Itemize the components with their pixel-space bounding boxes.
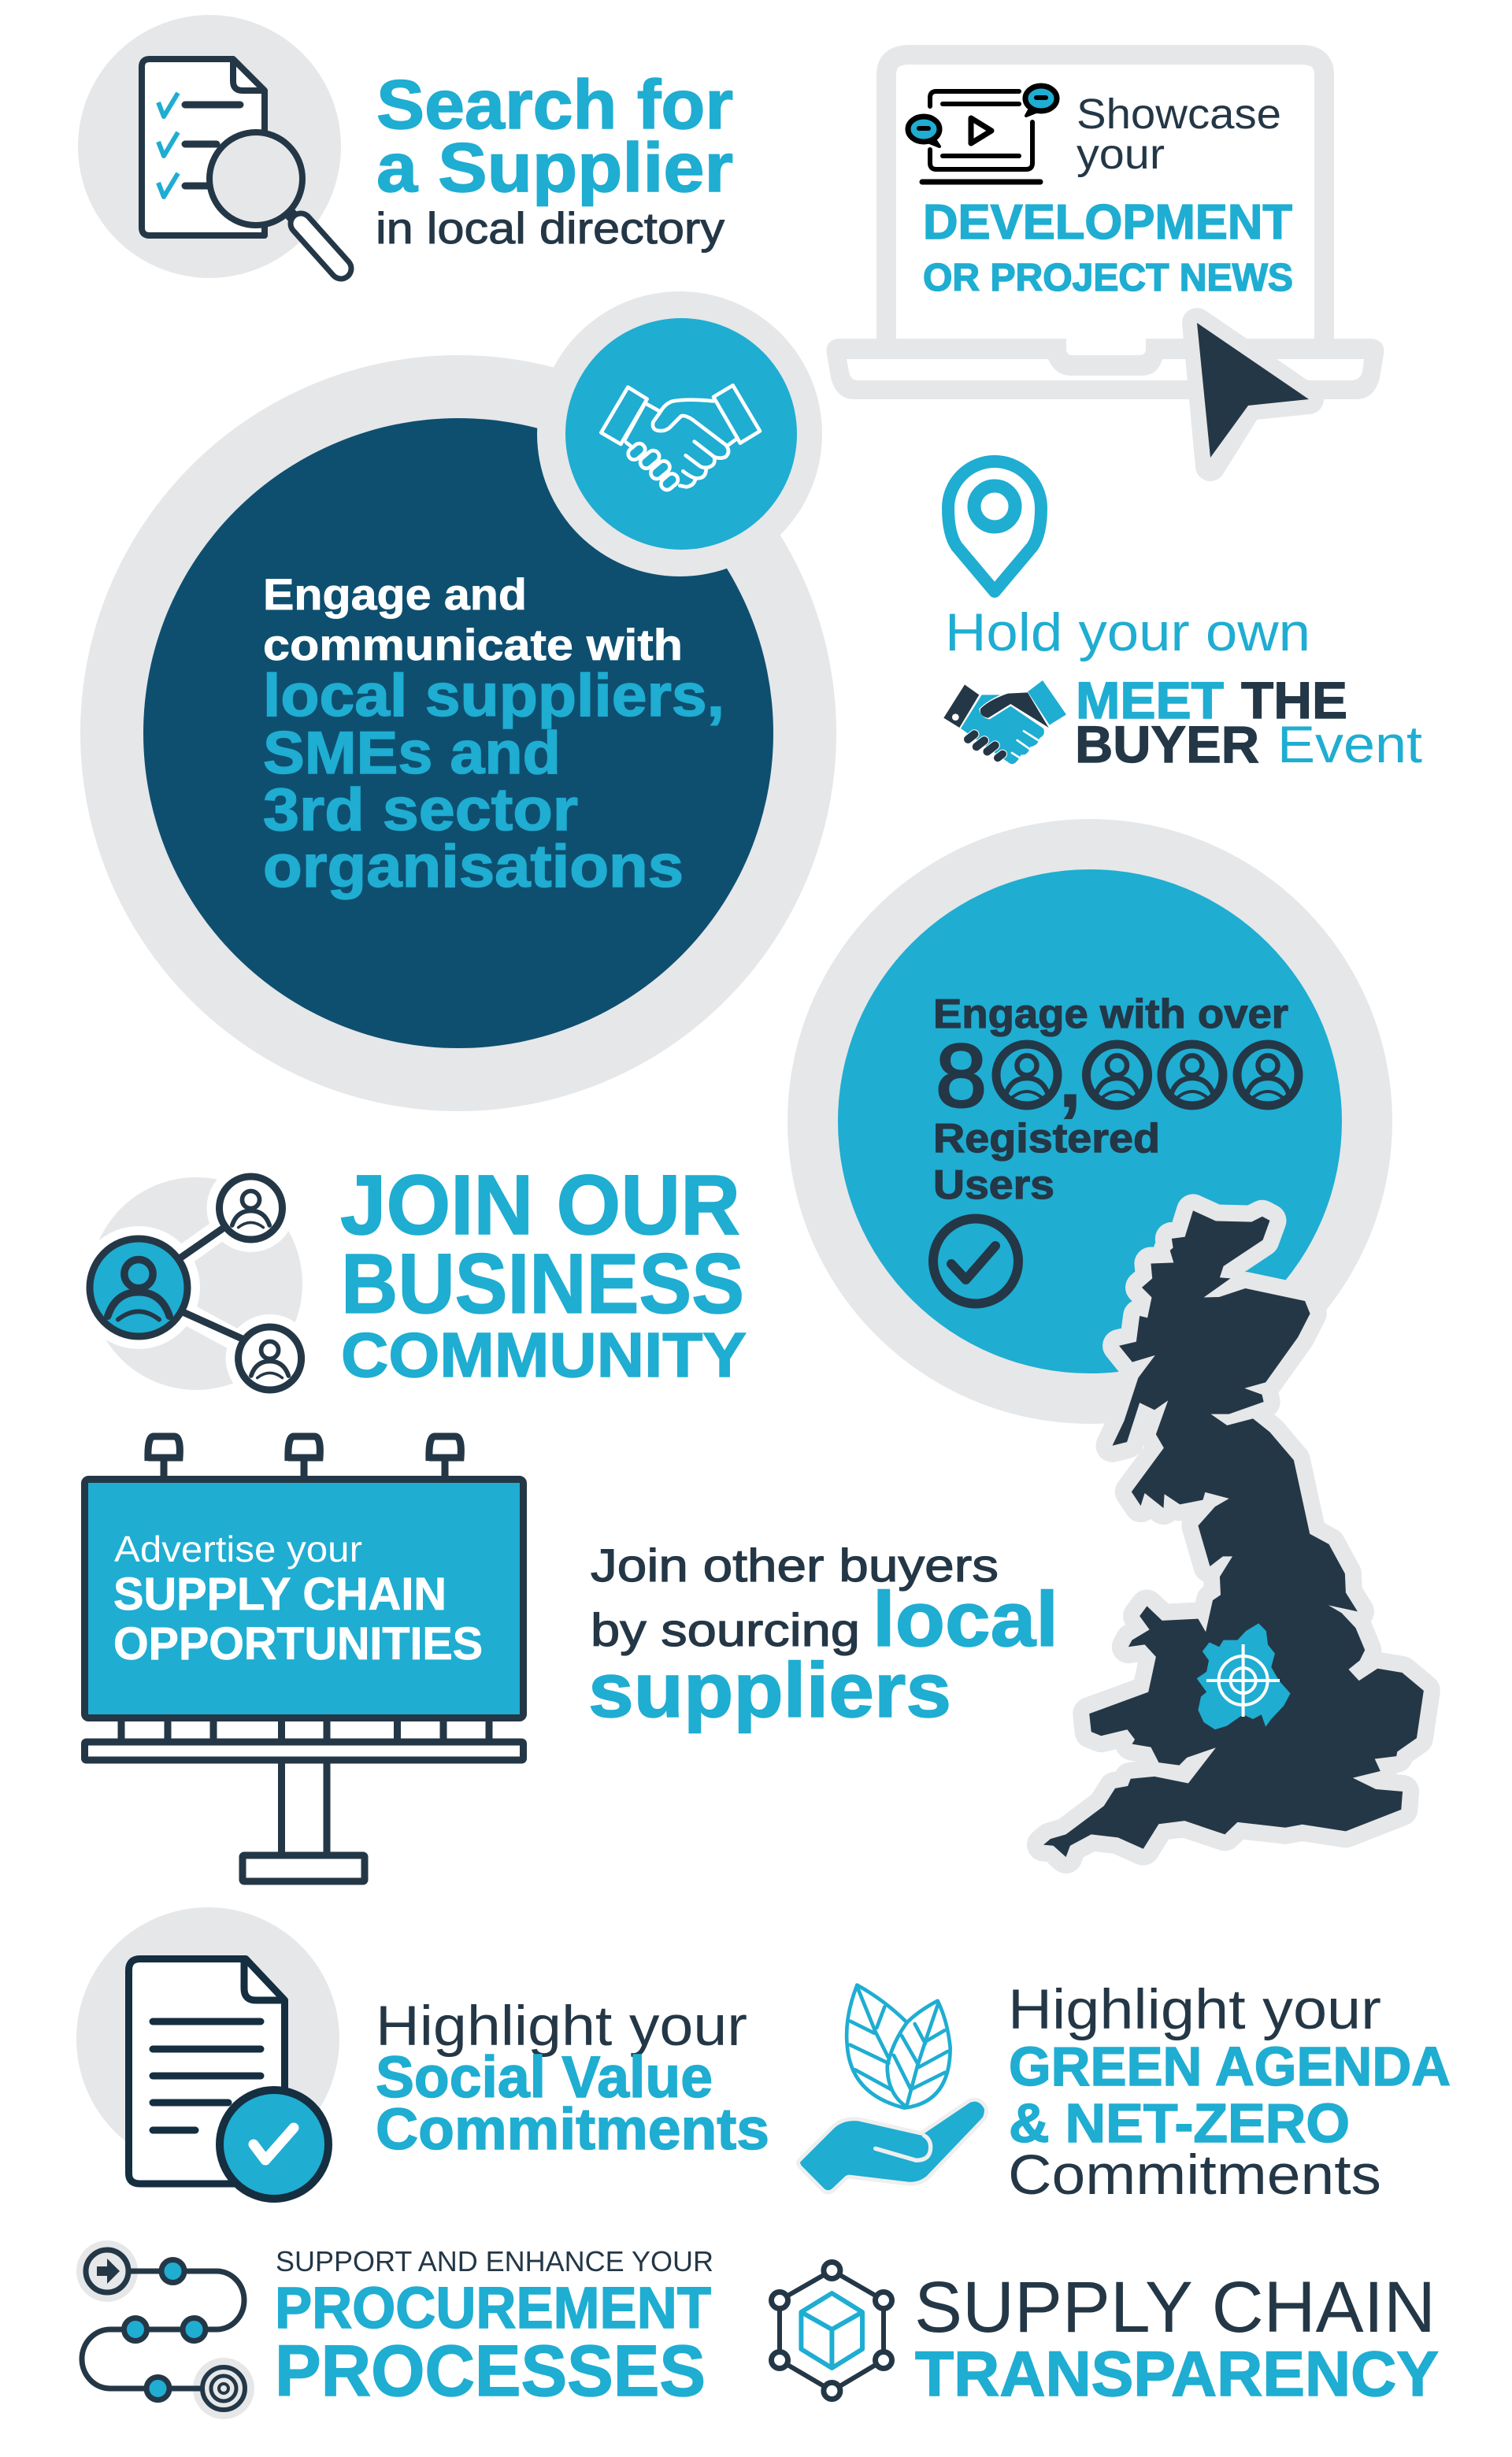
text: supply chain transparency bbox=[914, 2267, 1439, 2410]
text: engage and communicate bbox=[263, 569, 724, 900]
text: showcase your development: OR PROJECT NEWS bbox=[923, 257, 1293, 299]
heading: search for a supplier: a Supplier bbox=[376, 128, 733, 206]
panel: meet the buyer bbox=[943, 461, 1422, 773]
heading: search for a supplier bbox=[376, 65, 733, 253]
text: engage with over: Engage with over bbox=[933, 991, 1288, 1037]
text: join other buyers: local bbox=[873, 1576, 1058, 1662]
panel: supply chain transparency bbox=[772, 2262, 1439, 2410]
text: join other buyers: suppliers bbox=[588, 1647, 951, 1733]
text: procurement processes: PROCUREMENT bbox=[275, 2275, 711, 2340]
text: green agenda net-zero: GREEN AGENDA bbox=[1009, 2036, 1451, 2097]
panel: big dark circle bbox=[80, 291, 836, 1111]
text: meet the buyer event: THE bbox=[1241, 671, 1347, 729]
panel: 80,000 registered users bbox=[788, 819, 1392, 1424]
heading: join our business community: JOIN OUR bbox=[340, 1157, 740, 1252]
text: engage and communicate: SMEs and bbox=[263, 720, 561, 787]
text: hold your own: Hold your own bbox=[945, 602, 1310, 662]
icon: location pin bbox=[948, 461, 1041, 591]
panel: join our business community bbox=[77, 1157, 747, 1403]
text: join other buyers: Join other buyers bbox=[591, 1540, 999, 1592]
text: join other buyers: by sourcing bbox=[591, 1605, 860, 1656]
heading: search for a supplier: in local directory bbox=[376, 203, 724, 253]
icon: laptop outline bbox=[827, 55, 1384, 399]
figure: 80,000 with user icons: , bbox=[1059, 1036, 1081, 1124]
heading: join our business community bbox=[340, 1157, 747, 1390]
text: meet the buyer event bbox=[1075, 671, 1422, 773]
figure: 80,000 with user icons bbox=[936, 1026, 1299, 1125]
text: registered users bbox=[933, 1116, 1160, 1208]
heading: join our business community: COMMUNITY bbox=[341, 1320, 747, 1390]
icon: handshake badge bbox=[537, 291, 822, 576]
text: showcase your development: your bbox=[1077, 131, 1165, 178]
text: procurement processes bbox=[275, 2245, 713, 2411]
icon: connected users bbox=[77, 1164, 314, 1403]
text: supply chain transparency: SUPPLY CHAIN bbox=[914, 2267, 1436, 2348]
text: highlight social value: Social Value bbox=[376, 2044, 713, 2110]
icon: leaves in hand bbox=[800, 1985, 984, 2190]
icon: hexagon network cube bbox=[772, 2262, 891, 2399]
icon: cursor arrow bbox=[1197, 323, 1309, 466]
text: procurement processes: SUPPORT AND ENHANCE YOUR bbox=[276, 2245, 713, 2277]
text: highlight social value bbox=[376, 1996, 769, 2162]
text: green agenda net-zero: & NET-ZERO bbox=[1009, 2092, 1350, 2154]
text: advertise your supply chain opportunities: OPPORTUNITIES bbox=[113, 1618, 483, 1670]
icon: billboard structure bbox=[85, 1436, 523, 1881]
text: highlight social value: Highlight your bbox=[376, 1996, 747, 2058]
text: highlight social value: Commitments bbox=[376, 2096, 769, 2162]
panel: search for a supplier bbox=[78, 15, 733, 278]
panel: billboard bbox=[85, 1436, 523, 1881]
icon: document and magnifier bbox=[78, 15, 341, 278]
heading: join our business community: BUSINESS bbox=[341, 1236, 744, 1331]
text: registered users: Users bbox=[933, 1162, 1054, 1208]
panel: green agenda bbox=[800, 1979, 1451, 2207]
icon: check circle bbox=[933, 1219, 1018, 1304]
panel: laptop showcase bbox=[827, 55, 1384, 466]
text: meet the buyer event: MEET bbox=[1076, 671, 1224, 729]
text: join other buyers bbox=[588, 1540, 1058, 1733]
text: supply chain transparency: TRANSPARENCY bbox=[915, 2339, 1439, 2410]
text: advertise your supply chain opportunities bbox=[113, 1529, 483, 1670]
text: advertise your supply chain opportunities: SUPPLY CHAIN bbox=[113, 1569, 447, 1620]
panel: social value bbox=[76, 1907, 769, 2199]
text: engage and communicate: communicate with bbox=[263, 620, 683, 669]
text: engage and communicate: organisations bbox=[263, 833, 684, 900]
text: engage and communicate: Engage and bbox=[263, 569, 527, 619]
panel: procurement processes bbox=[76, 2240, 713, 2419]
icon: handshake small bbox=[943, 680, 1066, 764]
icon: video with speech bubbles bbox=[908, 86, 1057, 182]
figure: 80,000 with user icons: 8 bbox=[936, 1026, 987, 1125]
text: procurement processes: PROCESSES bbox=[275, 2331, 706, 2411]
text: showcase your development: Showcase bbox=[1077, 91, 1281, 138]
text: showcase your development: DEVELOPMENT bbox=[923, 195, 1292, 250]
heading: search for a supplier: Search for bbox=[376, 65, 733, 143]
text: engage and communicate: local suppliers, bbox=[263, 662, 724, 729]
icon: map target bbox=[1206, 1644, 1280, 1717]
text: green agenda net-zero bbox=[1008, 1979, 1451, 2207]
text: engage and communicate: 3rd sector bbox=[263, 776, 578, 843]
icon: document with check badge bbox=[76, 1907, 339, 2199]
icon: process path bbox=[76, 2240, 254, 2419]
text: meet the buyer event: Event bbox=[1277, 715, 1422, 773]
text: green agenda net-zero: Highlight your bbox=[1008, 1979, 1381, 2041]
text: advertise your supply chain opportunities: Advertise your bbox=[114, 1529, 362, 1569]
text: showcase your development bbox=[923, 91, 1293, 299]
map: united kingdom bbox=[1043, 1210, 1424, 1857]
text: meet the buyer event: BUYER bbox=[1075, 715, 1259, 773]
text: green agenda net-zero: Commitments bbox=[1008, 2144, 1381, 2207]
text: registered users: Registered bbox=[933, 1116, 1160, 1162]
